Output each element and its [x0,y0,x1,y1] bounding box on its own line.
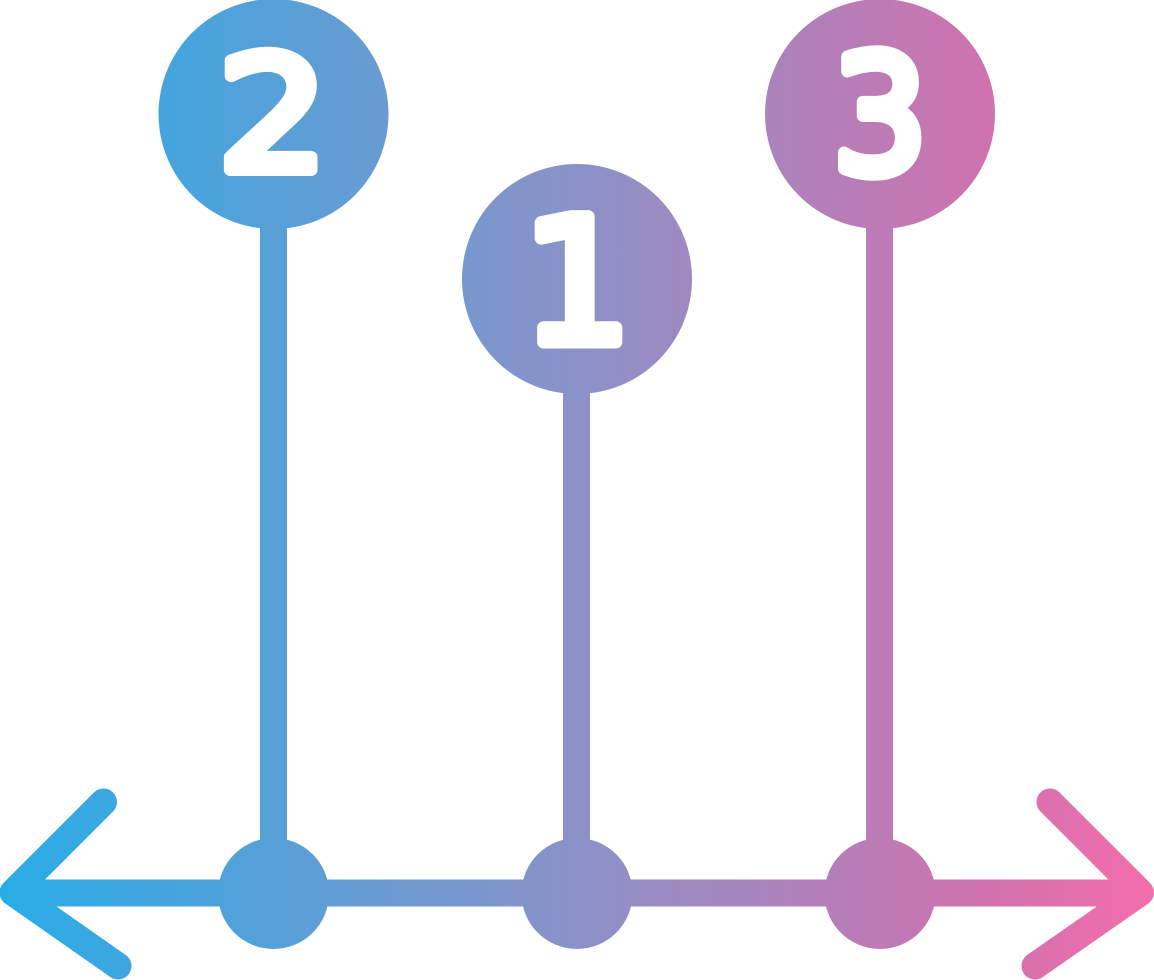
marker 1 [462,164,692,949]
axis dot 3 [824,838,936,949]
digit 2: 2 [218,24,328,208]
axis line [20,880,1134,906]
digit 1: 1 [522,182,632,383]
badge circle 1 [462,164,692,394]
left arrow [13,802,118,966]
marker 2 [158,0,388,949]
horizontal axis with arrows [13,802,1140,966]
axis dot 2 [218,838,329,949]
marker 3 [765,0,995,949]
stem 1 [563,360,590,860]
digit 3: 3 [833,22,927,211]
axis dot 1 [522,838,632,949]
badge circle 2 [158,0,388,229]
badge circle 3 [765,0,995,229]
right arrow [1035,802,1140,966]
stem 3 [866,200,893,860]
stem 2 [260,200,287,860]
